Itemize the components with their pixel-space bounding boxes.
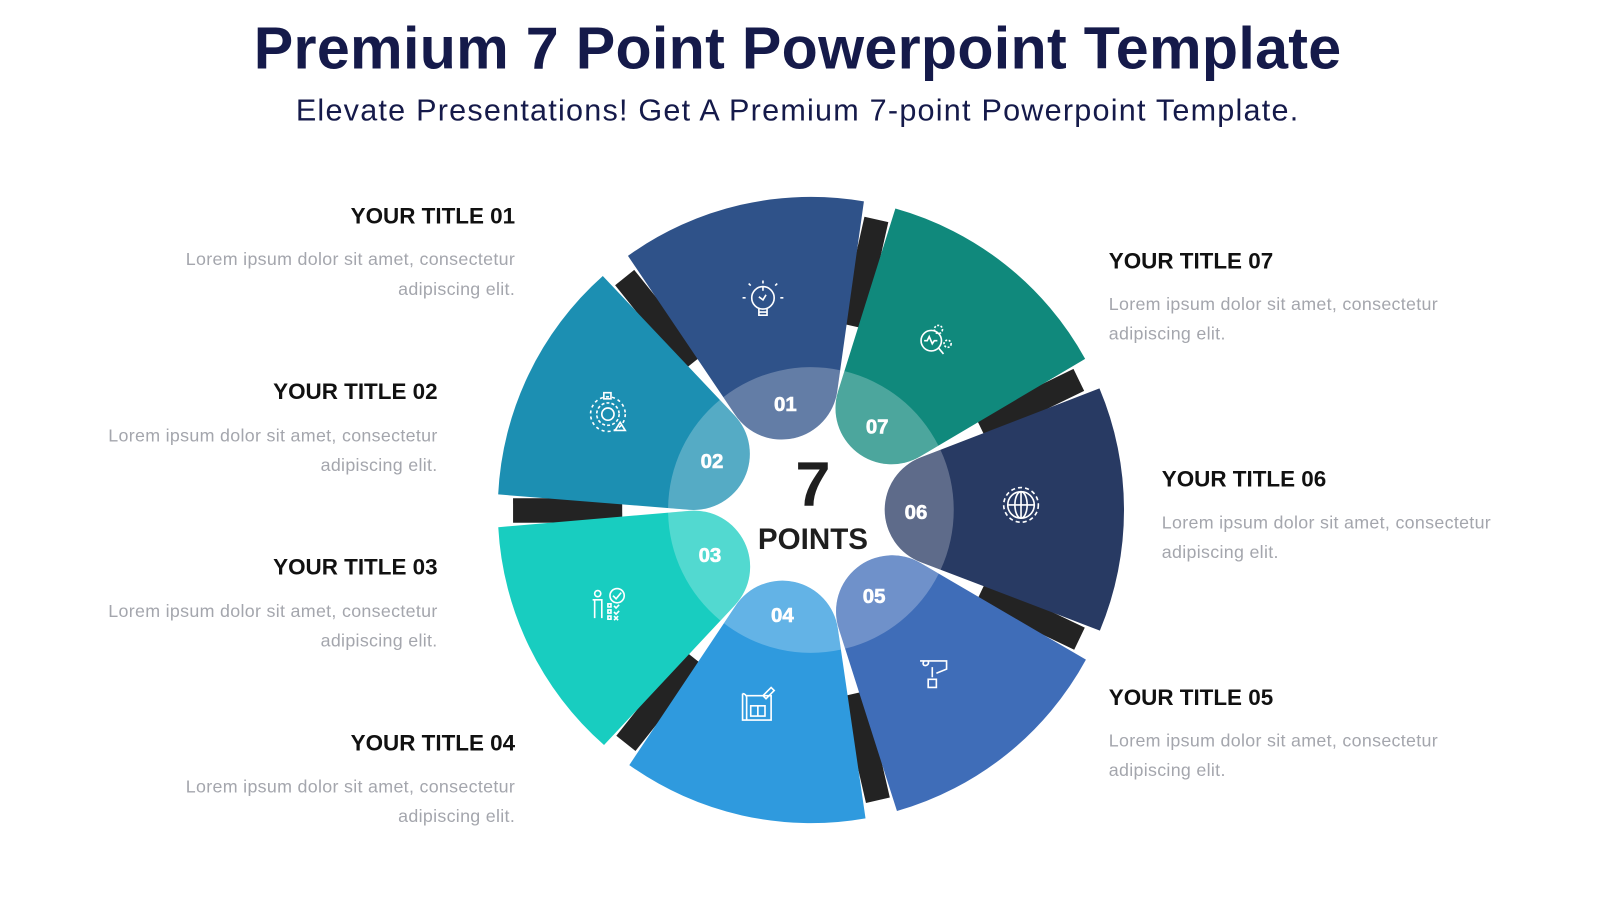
- subtitle: Elevate Presentations! Get A Premium 7-point Powerpoint Template.: [296, 93, 1299, 127]
- text: title 02: adipiscing elit.: [321, 455, 438, 475]
- text: title 07: [1109, 248, 1438, 344]
- segment 04: [624, 555, 913, 842]
- text: title 04: YOUR TITLE 04: [351, 731, 516, 756]
- text: title 02: [108, 379, 438, 475]
- wheel: [476, 178, 1124, 842]
- text: title 01: [186, 203, 515, 299]
- text: title 04: [186, 731, 516, 826]
- center label: [758, 450, 868, 556]
- text: title 02: Lorem ipsum dolor sit amet, consectetur: [108, 426, 438, 446]
- text: title 01: YOUR TITLE 01: [351, 203, 515, 228]
- icon: gear cycle: [591, 393, 625, 431]
- text: title 07: adipiscing elit.: [1109, 324, 1226, 344]
- segment 02: [476, 266, 797, 587]
- text: title 05: YOUR TITLE 05: [1109, 685, 1273, 710]
- text: title 03: adipiscing elit.: [321, 631, 438, 651]
- text: title 07: YOUR TITLE 07: [1109, 248, 1273, 273]
- segment 07: [762, 189, 1100, 527]
- text: title 04: Lorem ipsum dolor sit amet, consectetur: [186, 777, 515, 797]
- icon: globe gear: [1004, 488, 1038, 522]
- text: title 04: adipiscing elit.: [398, 806, 515, 826]
- text: title 01: adipiscing elit.: [398, 279, 515, 299]
- text: title 06: [1162, 467, 1491, 562]
- icon: person checklist: [593, 589, 624, 620]
- segment numbers: 04: [771, 605, 794, 627]
- segment numbers: 06: [905, 502, 927, 524]
- segment numbers: 01: [774, 394, 797, 416]
- text: title 01: Lorem ipsum dolor sit amet, consectetur: [186, 249, 515, 269]
- segment 06: [885, 388, 1124, 631]
- segment 01: [622, 178, 912, 465]
- text: title 03: YOUR TITLE 03: [273, 554, 438, 579]
- title: Premium 7 Point Powerpoint Template: [254, 14, 1342, 81]
- segment numbers: 03: [699, 545, 721, 567]
- segment numbers: 05: [863, 586, 885, 608]
- text: title 06: adipiscing elit.: [1162, 542, 1279, 562]
- center label: POINTS: [758, 523, 868, 556]
- icon: blueprint: [743, 687, 774, 720]
- text: title 06: YOUR TITLE 06: [1162, 467, 1326, 492]
- segment 03: [476, 433, 797, 756]
- text: title 03: Lorem ipsum dolor sit amet, consectetur: [108, 601, 438, 621]
- text: title 02: YOUR TITLE 02: [273, 379, 438, 404]
- page content: [108, 14, 1491, 842]
- dark strips: [513, 217, 1085, 803]
- text: title 07: Lorem ipsum dolor sit amet, consectetur: [1109, 294, 1438, 314]
- text: title 06: Lorem ipsum dolor sit amet, consectetur: [1162, 512, 1491, 532]
- text: title 05: Lorem ipsum dolor sit amet, consectetur: [1109, 731, 1438, 751]
- segment numbers: 02: [701, 451, 723, 473]
- center label: 7: [795, 450, 831, 520]
- segment numbers: 07: [866, 417, 889, 439]
- icon: hand plant: [920, 661, 947, 687]
- text: title 05: adipiscing elit.: [1109, 760, 1226, 780]
- segment 05: [763, 492, 1101, 830]
- text: title 03: [108, 554, 438, 651]
- icon: magnifier gears: [921, 325, 951, 354]
- segment numbers: [699, 394, 927, 627]
- text: title 05: [1109, 685, 1438, 780]
- icon: lightbulb: [743, 280, 783, 315]
